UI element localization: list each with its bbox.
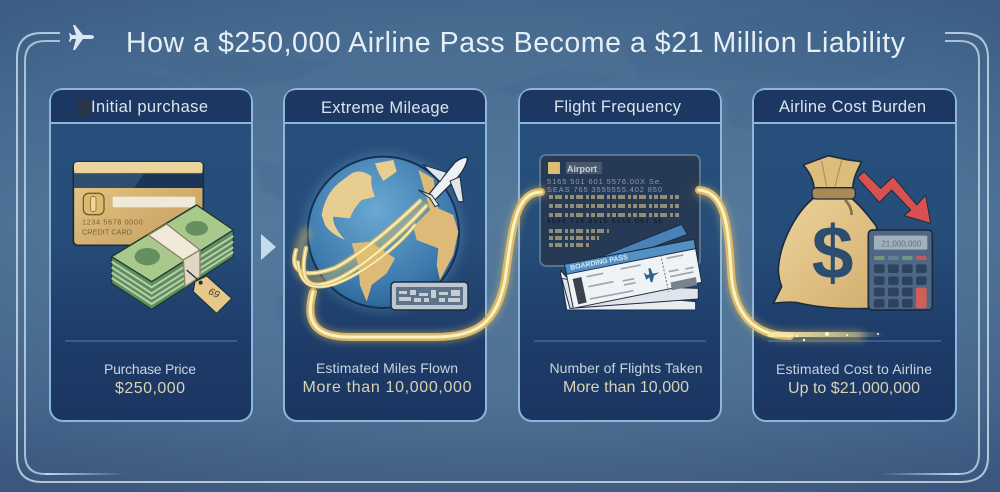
- icon: globe mileage plate: [391, 282, 468, 310]
- icon: falling red arrow: [857, 172, 931, 223]
- divider: [65, 340, 237, 342]
- panel header: [520, 90, 720, 122]
- value: More than 10,000,000: [302, 379, 472, 396]
- heading: Initial purchase: [91, 98, 208, 116]
- title: How a $250,000 Airline Pass Become a $21 Million Liability: [126, 27, 906, 59]
- divider: [768, 340, 941, 342]
- world map backdrop: [70, 15, 920, 460]
- value: $250,000: [115, 380, 185, 397]
- icon: boarding passes: BOARDING PASS: [570, 254, 629, 272]
- label: Number of Flights Taken: [550, 360, 702, 376]
- heading: Extreme Mileage: [321, 99, 449, 117]
- label: Estimated Cost to Airline: [776, 361, 932, 377]
- panel header: [754, 90, 955, 122]
- icon: jet over globe: [418, 157, 468, 207]
- icon: credit card: 1234 5678 0000: [82, 218, 143, 227]
- icon: flight board: 5165 501 601 5576.00X Se.: [547, 177, 662, 186]
- icon: money bag: [773, 156, 877, 309]
- panel: extreme mileage: [284, 89, 486, 421]
- value: More than 10,000: [563, 379, 689, 396]
- heading: Airline Cost Burden: [779, 98, 926, 116]
- main ribbon: [310, 192, 541, 337]
- label: Purchase Price: [104, 361, 196, 377]
- panel: flight frequency: [519, 89, 721, 421]
- header smudge: [78, 99, 91, 116]
- icon: flight board: Airport: [567, 164, 597, 174]
- value: Up to $21,000,000: [788, 380, 920, 397]
- divider: [534, 340, 706, 342]
- icon: flight board: 8556 728 8515 5516 061 56: [547, 218, 662, 225]
- gold flight ribbon: [294, 190, 885, 337]
- panel: airline cost burden: [753, 89, 956, 421]
- icon: price tag: 69: [206, 286, 221, 301]
- icon: credit card: [73, 162, 203, 245]
- icon: calculator: 21,000,000: [881, 239, 922, 248]
- icon: money bag: $: [812, 210, 854, 294]
- icon: airplane top left: [69, 25, 94, 50]
- ribbon sparkles: [796, 332, 879, 341]
- panel: initial purchase: [50, 89, 252, 421]
- icon: credit card: CREDIT CARD: [82, 227, 132, 236]
- icon: flight board: SEAS 765 3555555.402 850: [547, 185, 662, 194]
- icon: flight board: [540, 155, 700, 266]
- icon: bundle of cash: [112, 205, 233, 309]
- icon: boarding passes: [560, 224, 702, 310]
- heading: Flight Frequency: [554, 98, 682, 116]
- icon: price tag: [187, 270, 232, 313]
- globe swirl strands: [294, 201, 426, 287]
- label: Estimated Miles Flown: [316, 360, 458, 376]
- panel header: [51, 90, 251, 122]
- panel header: [285, 90, 485, 122]
- icon: calculator: [868, 230, 932, 310]
- arrow: next step: [261, 234, 276, 260]
- icon: globe: [303, 152, 463, 312]
